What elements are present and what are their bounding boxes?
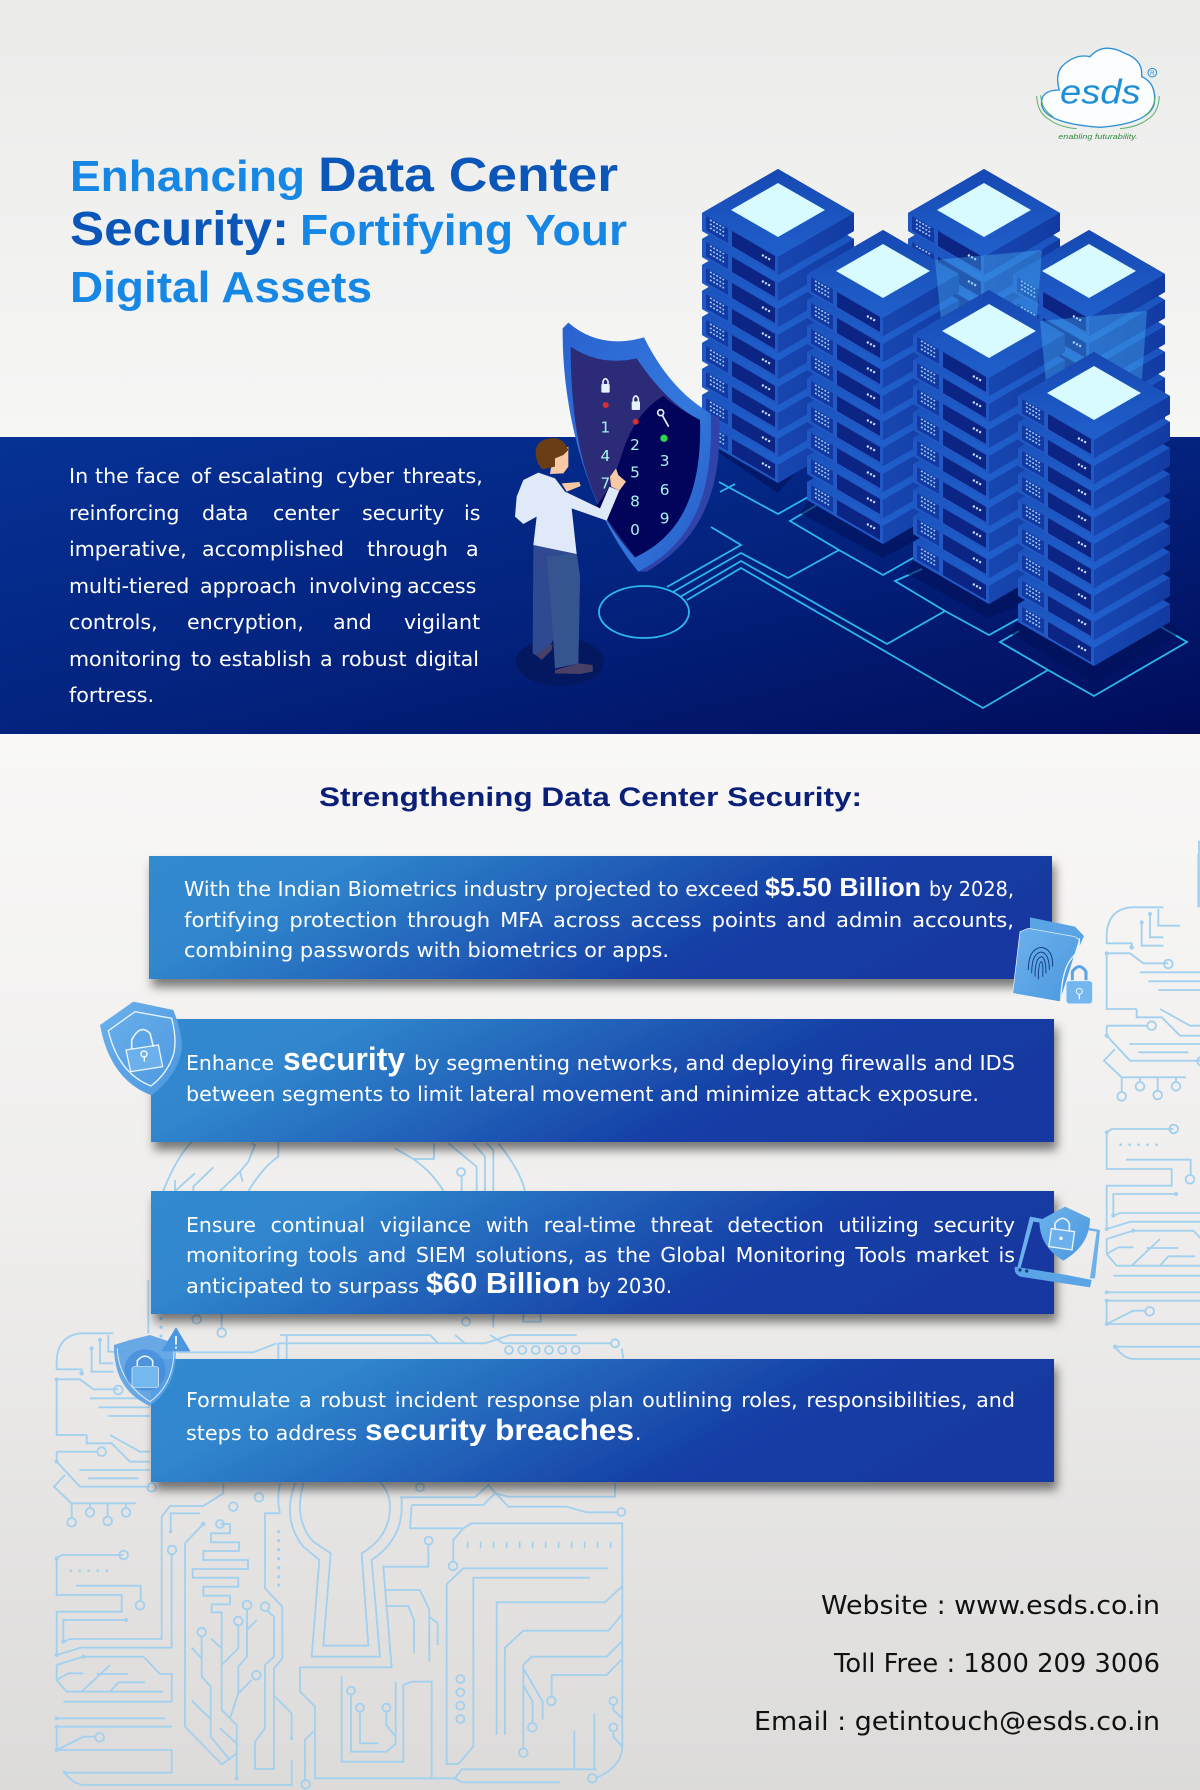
- intro paragraph: center: [273, 501, 340, 525]
- server stack 6: [1018, 352, 1170, 666]
- illustration: shield keypad: 5: [630, 464, 640, 482]
- intro paragraph: threats,: [403, 464, 483, 488]
- panel: card 1 biometrics: [149, 856, 1052, 979]
- card 2 text: between segments to limit lateral movement and minimize attack exposure.: [186, 1082, 979, 1106]
- intro paragraph: a: [466, 537, 479, 561]
- illustration: shield keypad: 2: [630, 436, 640, 454]
- card 3 text: $60 Billion: [426, 1268, 580, 1300]
- illustration: shield keypad: [563, 323, 720, 572]
- icon: laptop with shield: [1015, 1207, 1100, 1287]
- decorative circuit patterns: [54, 841, 1200, 1789]
- intro paragraph: through: [367, 537, 448, 561]
- title: Fortifying Your: [300, 206, 627, 255]
- illustration: shield keypad: 9: [660, 509, 670, 527]
- card 1 text: fortifying protection through MFA across access points and admin accounts,: [184, 908, 1014, 932]
- intro paragraph: accomplished: [202, 537, 344, 561]
- server stack 3: [908, 169, 1060, 405]
- server stack 1: [702, 169, 854, 483]
- intro paragraph: cyber: [336, 464, 394, 488]
- intro paragraph: and: [333, 610, 372, 634]
- intro paragraph: establish: [219, 647, 311, 671]
- contact details: Website : www.esds.co.in: [821, 1591, 1160, 1621]
- contact details: [754, 1591, 1160, 1737]
- logo: esds cloud: R: [1150, 71, 1155, 77]
- banner: dark blue band: [0, 437, 1200, 734]
- card 3 text: by 2030.: [587, 1274, 672, 1298]
- intro paragraph: the: [95, 464, 129, 488]
- card 4 text: [186, 1388, 1015, 1447]
- card 1 text: combining passwords with biometrics or apps.: [184, 938, 669, 962]
- contact details: Email : getintouch@esds.co.in: [754, 1707, 1160, 1737]
- server stack 5: [913, 290, 1065, 604]
- intro paragraph: face: [136, 464, 180, 488]
- card 2 text: security: [283, 1041, 405, 1077]
- card 3 text: [186, 1213, 1015, 1300]
- card 2 text: [186, 1041, 1015, 1106]
- intro paragraph: a: [320, 647, 333, 671]
- floor circuit lines: [599, 482, 1187, 708]
- title: Security:: [70, 203, 289, 256]
- card 4 text: steps to address: [186, 1421, 357, 1445]
- icon: shield with padlock: [100, 1002, 182, 1095]
- intro paragraph: imperative,: [69, 537, 187, 561]
- intro paragraph: to: [191, 647, 212, 671]
- card 4 text: security breaches: [365, 1414, 634, 1447]
- illustration: man in shirt touching shield: [515, 438, 626, 686]
- card 1 text: by 2028,: [929, 877, 1014, 901]
- card 3 text: monitoring tools and SIEM solutions, as the Global Monitoring Tools market is: [186, 1243, 1015, 1267]
- title: Data Center: [318, 149, 618, 202]
- intro paragraph: reinforcing: [69, 501, 180, 525]
- intro paragraph: [69, 464, 483, 707]
- section heading: Strengthening Data Center Security:: [319, 782, 862, 812]
- contact details: Toll Free : 1800 209 3006: [833, 1649, 1160, 1679]
- intro paragraph: security: [362, 501, 444, 525]
- server stack 4: [1013, 230, 1165, 466]
- intro paragraph: digital: [415, 647, 479, 671]
- icon: folder with fingerprint and lock: [1013, 917, 1093, 1004]
- logo: esds cloud: [1037, 48, 1159, 141]
- panel: card 4 incident response: [151, 1359, 1054, 1482]
- intro paragraph: access: [407, 574, 476, 598]
- title: [70, 149, 627, 312]
- logo: esds cloud: enabling futurability.: [1058, 132, 1138, 141]
- title: Enhancing: [70, 152, 305, 201]
- illustration: shield keypad: 0: [630, 521, 640, 539]
- intro paragraph: controls,: [69, 610, 158, 634]
- card 2 text: Enhance: [186, 1051, 274, 1075]
- title: Digital Assets: [70, 263, 372, 312]
- card 1 text: [184, 872, 1014, 962]
- illustration: shield keypad: 8: [630, 492, 640, 510]
- intro paragraph: encryption,: [187, 610, 304, 634]
- card 4 text: .: [635, 1421, 641, 1445]
- card 3 text: anticipated to surpass: [186, 1274, 419, 1298]
- intro paragraph: of: [191, 464, 212, 488]
- logo: esds cloud: esds: [1060, 73, 1141, 111]
- card 4 text: Formulate a robust incident response plan outlining roles, responsibilities, and: [186, 1388, 1015, 1412]
- panel: card 3 monitoring: [151, 1191, 1054, 1314]
- intro paragraph: monitoring: [69, 647, 181, 671]
- intro paragraph: multi-tiered: [69, 574, 189, 598]
- intro paragraph: involving: [309, 574, 402, 598]
- server stack 2: [807, 230, 959, 544]
- intro paragraph: vigilant: [404, 610, 480, 634]
- card 1 text: With the Indian Biometrics industry projected to exceed: [184, 877, 759, 901]
- intro paragraph: data: [202, 501, 248, 525]
- illustration: shield keypad: 4: [600, 447, 610, 465]
- card 1 text: $5.50 Billion: [765, 872, 921, 902]
- illustration: shield keypad: 6: [660, 481, 670, 499]
- intro paragraph: is: [464, 501, 480, 525]
- illustration: shield keypad: 1: [600, 419, 610, 437]
- intro paragraph: In: [69, 464, 88, 488]
- illustration: isometric server racks: [690, 169, 1180, 683]
- intro paragraph: escalating: [218, 464, 324, 488]
- intro paragraph: approach: [200, 574, 296, 598]
- intro paragraph: robust: [341, 647, 407, 671]
- panel: card 2 segmentation: [151, 1019, 1054, 1142]
- card 2 text: by segmenting networks, and deploying firewalls and IDS: [414, 1051, 1015, 1075]
- card 3 text: Ensure continual vigilance with real-time threat detection utilizing security: [186, 1213, 1015, 1237]
- icon: shield with lock and warning triangle: [114, 1328, 189, 1406]
- illustration: shield keypad: 7: [600, 475, 610, 493]
- illustration: shield keypad: 3: [660, 452, 670, 470]
- intro paragraph: fortress.: [69, 683, 154, 707]
